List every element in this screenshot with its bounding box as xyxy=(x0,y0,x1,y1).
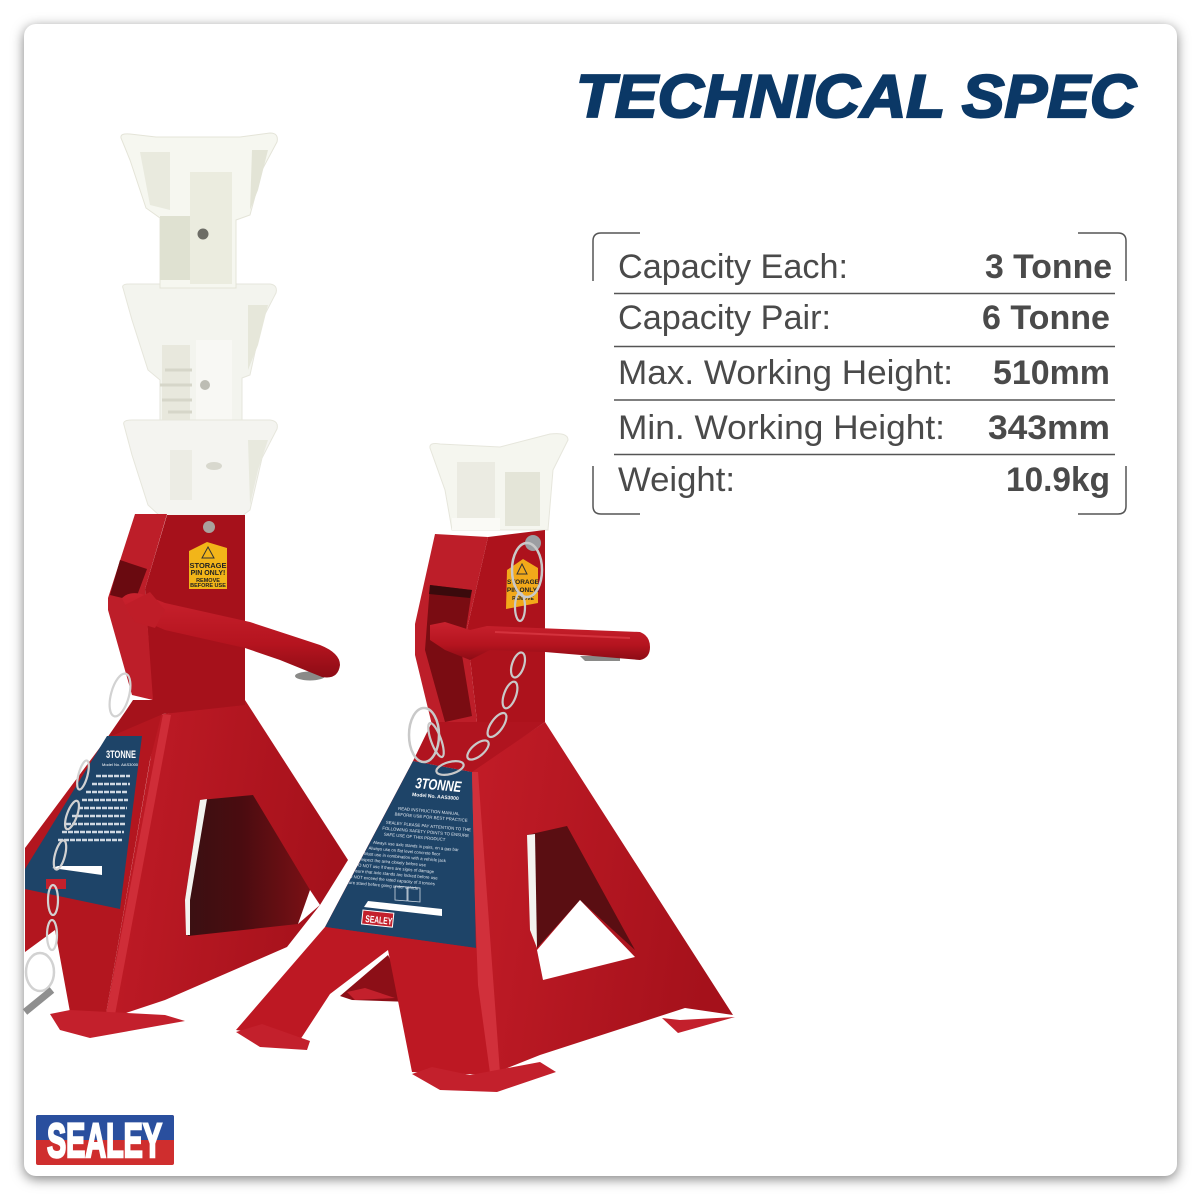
row: min working height: 343mm xyxy=(988,409,1110,447)
title: TECHNICAL SPEC xyxy=(576,63,1138,130)
storage pin warning sign xyxy=(506,559,540,609)
row: weight: 10.9kg xyxy=(1006,461,1110,499)
storage pin warning sign: REMOVE xyxy=(512,596,534,602)
instruction label: Inspect the area closely before use xyxy=(359,857,427,868)
ratchet handle xyxy=(430,622,650,661)
white extended saddle post xyxy=(121,133,277,520)
instruction label: BEFORE USE FOR BEST PRACTICE xyxy=(394,812,468,823)
row: min working height xyxy=(618,409,1110,447)
row: capacity each xyxy=(618,248,1112,286)
instruction label: 3TONNE xyxy=(106,749,136,761)
instruction label: Ensure that axle stands are locked before use xyxy=(350,868,438,881)
logo: Sealey: SEALEY xyxy=(47,1115,162,1168)
rear foot and leg xyxy=(340,955,412,1002)
red column body xyxy=(145,515,245,712)
instruction label: Always use axle stands in pairs, on a gas bar xyxy=(373,840,460,852)
row: weight: Weight: xyxy=(618,461,735,499)
instruction label: 3TONNE xyxy=(415,775,463,796)
sloped base panels xyxy=(470,722,733,1075)
instruction label: Secure stand before going under vehicle xyxy=(341,879,419,891)
row: capacity each: 3 Tonne xyxy=(985,248,1112,286)
logo: Sealey xyxy=(36,1115,174,1168)
instruction label xyxy=(25,736,142,909)
row: capacity pair xyxy=(618,299,1110,337)
instruction label: Must use in combination with a vehicle jack xyxy=(364,851,447,863)
row: capacity pair: Capacity Pair: xyxy=(618,299,831,337)
instruction label: Model No. AAS3000 xyxy=(412,792,459,802)
instruction label: READ INSTRUCTION MANUAL xyxy=(398,806,460,816)
instruction label: SEALEY xyxy=(365,914,393,928)
ratchet handle xyxy=(122,592,340,680)
storage pin warning sign: STORAGE xyxy=(190,561,226,570)
axle stand: rear left with three-position saddle xyxy=(25,133,348,1038)
red column body xyxy=(467,530,545,722)
row: capacity each: Capacity Each: xyxy=(618,248,848,286)
chain and ring xyxy=(25,671,134,1012)
spec table xyxy=(593,233,1126,514)
row: max working height: Max. Working Height: xyxy=(618,354,953,392)
base window xyxy=(527,826,635,980)
storage pin warning sign: STORAGE xyxy=(507,579,540,586)
storage pin warning sign: REMOVE xyxy=(196,578,220,584)
row: max working height: 510mm xyxy=(993,354,1110,392)
base window xyxy=(185,795,320,936)
instruction label: Always use on flat level concrete floor xyxy=(368,845,441,857)
instruction label: DO NOT exceed the rated capacity of 3 tonnes xyxy=(346,874,435,886)
instruction label: SAFE USE OF THIS PRODUCT xyxy=(384,832,446,842)
sloped base panels xyxy=(105,700,348,1020)
storage pin warning sign: BEFORE USE xyxy=(190,583,226,589)
axle stand: front right with lowered saddle xyxy=(236,434,735,1092)
row: min working height: Min. Working Height: xyxy=(618,409,945,447)
row: weight xyxy=(618,461,1110,499)
instruction label: SEALEY PLEASE PAY ATTENTION TO THE xyxy=(386,820,471,832)
instruction label: DO NOT use if there are signs of damage xyxy=(355,862,435,874)
storage pin warning sign: PIN ONLY! xyxy=(507,587,539,594)
instruction label xyxy=(325,761,476,948)
foot plates xyxy=(236,1017,735,1092)
foot plate xyxy=(50,1010,185,1038)
row: capacity pair: 6 Tonne xyxy=(982,299,1110,337)
instruction label: FOLLOWING SAFETY POINTS TO ENSURE xyxy=(382,826,469,838)
white saddle xyxy=(430,434,568,530)
row: max working height xyxy=(618,354,1110,392)
storage pin warning sign: PIN ONLY! xyxy=(191,570,225,577)
instruction label: Model No. AAS3000 xyxy=(102,762,139,767)
storage pin warning sign xyxy=(189,542,227,589)
table frame brackets xyxy=(593,233,1126,514)
chain and rings xyxy=(409,543,542,777)
